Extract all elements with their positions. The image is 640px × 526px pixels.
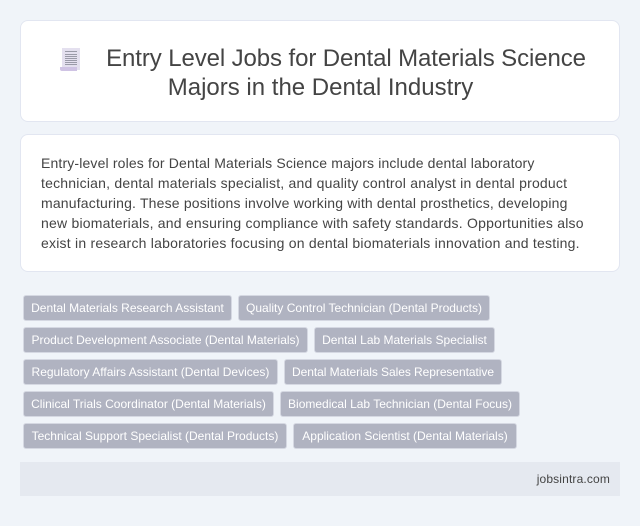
description text: manufacturing. These positions involve working with dental prosthetics, developing <box>41 195 568 211</box>
tag <box>23 327 308 353</box>
tag <box>280 391 520 417</box>
job tags <box>23 295 520 449</box>
description text: new biomaterials, and ensuring compliance with safety standards. Opportunities also <box>41 215 584 231</box>
description text: technician, dental materials specialist, and quality control analyst in dental product <box>41 175 567 191</box>
tag: Regulatory Affairs Assistant (Dental Devices) <box>32 365 269 379</box>
description text: Entry-level roles for Dental Materials Science majors include dental laboratory <box>41 155 535 171</box>
title: Entry Level Jobs for Dental Materials Science <box>106 45 586 72</box>
tag <box>23 295 232 321</box>
tag <box>23 359 278 385</box>
header card <box>20 20 620 122</box>
description text <box>41 155 584 251</box>
footer source text: jobsintra.com <box>537 472 610 486</box>
tag <box>314 327 495 353</box>
tag: Dental Materials Sales Representative <box>292 365 494 379</box>
tag <box>23 391 274 417</box>
tag <box>238 295 490 321</box>
tag: Application Scientist (Dental Materials) <box>302 429 508 443</box>
tag: Dental Lab Materials Specialist <box>322 333 487 347</box>
footer bar <box>20 462 620 496</box>
description text: exist in research laboratories focusing on dental biomaterials innovation and testing. <box>41 235 580 251</box>
title: Majors in the Dental Industry <box>168 74 473 101</box>
description card <box>20 134 620 272</box>
tag: Quality Control Technician (Dental Products) <box>246 301 482 315</box>
tag: Clinical Trials Coordinator (Dental Materials) <box>31 397 266 411</box>
tag <box>293 423 517 449</box>
tag: Dental Materials Research Assistant <box>31 301 224 315</box>
tag: Biomedical Lab Technician (Dental Focus) <box>288 397 512 411</box>
icon: document scroll <box>60 48 80 71</box>
tag: Technical Support Specialist (Dental Products) <box>32 429 278 443</box>
tag <box>284 359 502 385</box>
tag <box>23 423 287 449</box>
title <box>106 45 586 101</box>
tag: Product Development Associate (Dental Materials) <box>31 333 300 347</box>
